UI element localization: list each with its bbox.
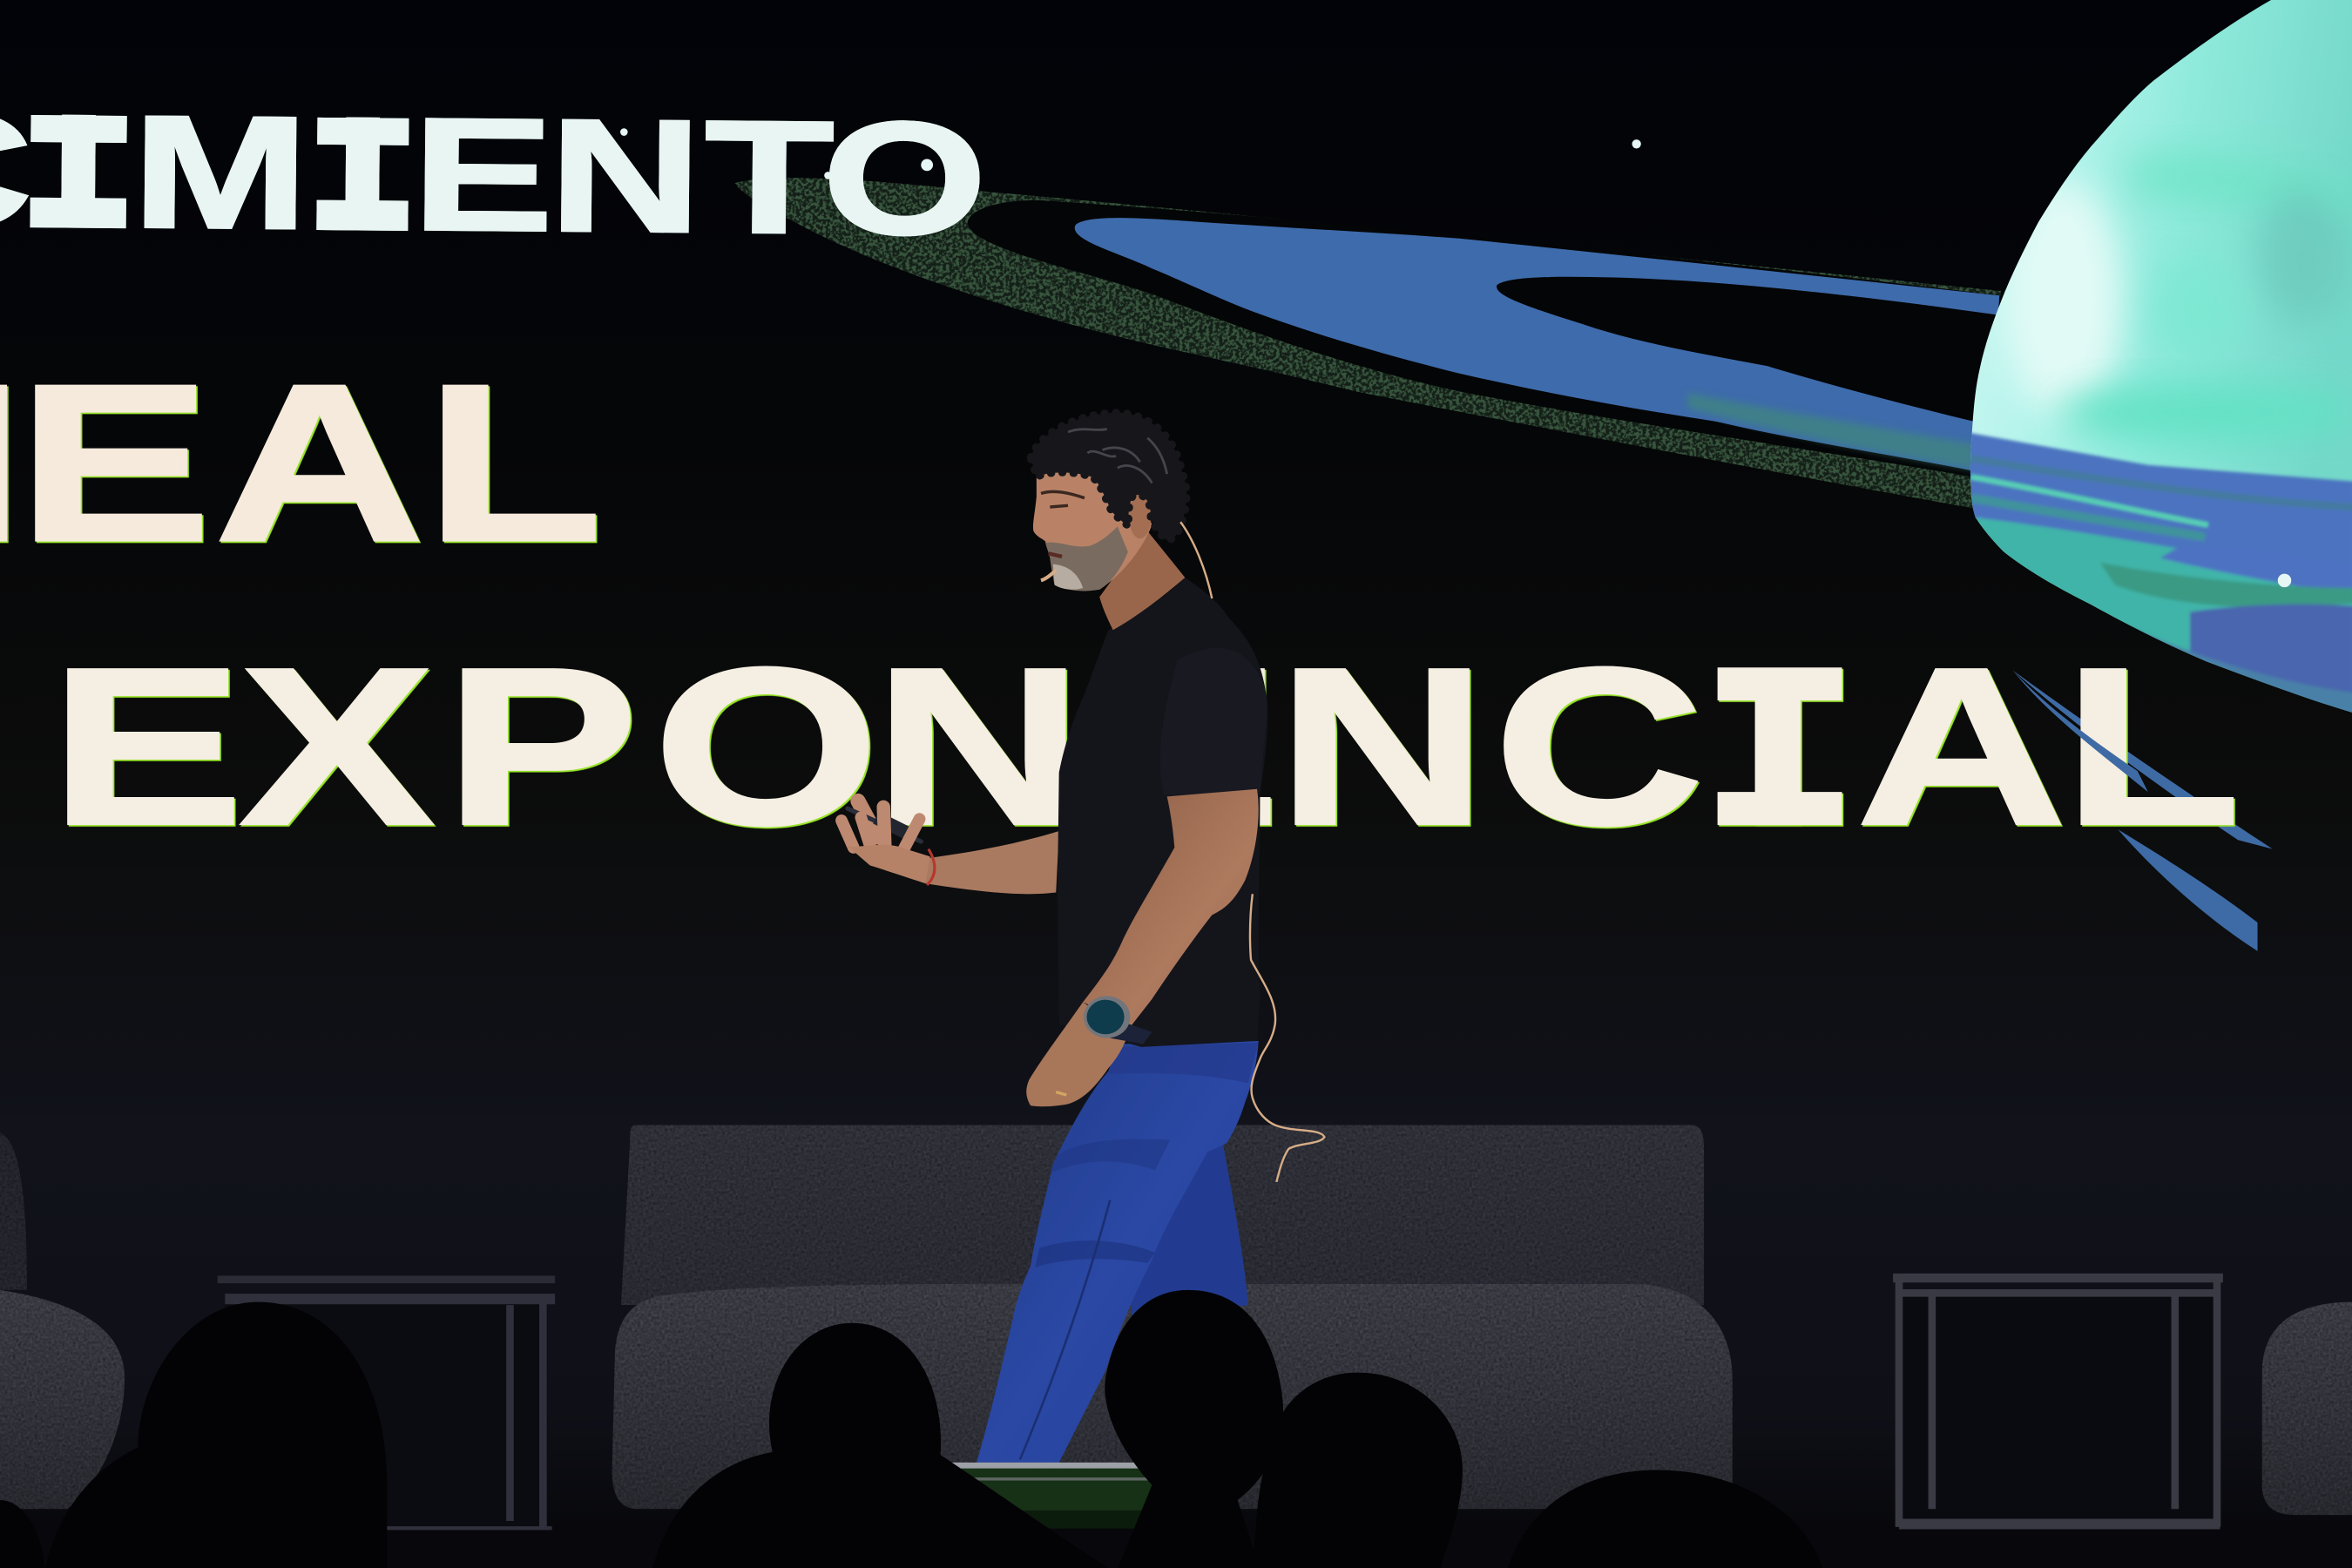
planet bands [1965,432,2352,720]
left sofa [0,1132,125,1509]
audience head and shoulders: left [45,1302,387,1568]
wristband [927,849,935,885]
lower ring fragments [2013,671,2273,849]
hair highlights [1068,429,1167,483]
phone [848,808,921,841]
outer ring base [735,178,2001,509]
neck [1099,531,1185,630]
ear [1129,494,1152,538]
outer speckled ring [735,178,2001,509]
audience head and shoulders: centre left [652,1323,1110,1568]
right side table [1893,1275,2223,1527]
saturn rings [735,178,2273,951]
mouth [1049,553,1062,557]
inner dark gap [968,200,2001,477]
floor [0,1530,2352,1568]
planet [1950,0,2352,720]
beard [1045,526,1128,591]
raised hand [841,801,930,883]
rear leg [1125,1110,1248,1320]
near arm [1083,789,1259,1026]
watch [1084,996,1152,1044]
headset microphone and cable [1041,522,1324,1182]
speaker [841,413,1324,1463]
eyebrow and eye [1041,491,1085,507]
stage monitor [937,1463,1185,1529]
wedding ring [1056,1092,1066,1095]
t-shirt [1058,578,1267,1047]
ring tail over text [2013,671,2148,792]
audience head and shoulders: centre right [1253,1373,1463,1568]
greenish ring highlight [1687,393,1974,470]
sofa back [621,1125,1704,1305]
stars [620,128,2291,587]
centre sofa [612,1125,1733,1509]
face [1033,457,1152,591]
left side table [218,1280,555,1536]
audience head: far left [0,1500,45,1568]
sofa seat [612,1284,1733,1509]
lower hand [1026,1002,1128,1106]
headline line 3: EXPONENCIAL [50,622,2240,872]
audience head and shoulders: centre [1105,1290,1283,1568]
blue ring band [1075,218,1999,471]
trousers [977,1041,1259,1463]
far arm [925,831,1059,894]
hair [1031,413,1186,540]
right sofa [2262,1302,2352,1515]
audience head: right [1508,1470,1822,1568]
audience silhouettes [0,1290,1822,1568]
